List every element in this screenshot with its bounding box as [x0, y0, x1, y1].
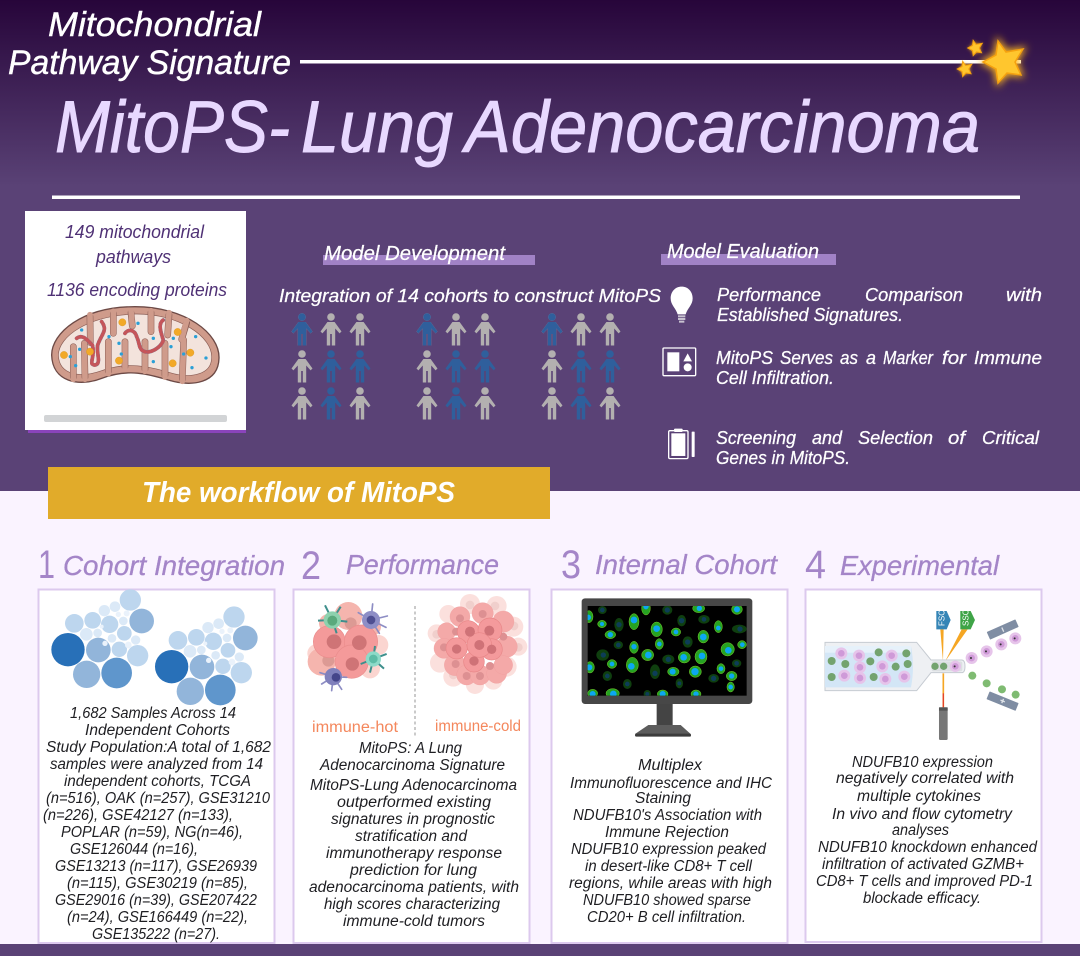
header background [0, 0, 1080, 491]
text: critical genes [716, 428, 1040, 468]
icon: light bulb [671, 287, 693, 323]
text: cohorts description: (n=226), GSE42127 (n=133), [43, 807, 233, 824]
heading: step 3: Internal Cohort [595, 549, 778, 580]
heading: step 4 [805, 543, 1000, 587]
icon: mitochondrion [52, 307, 219, 383]
text: signature description: prediction for lung [349, 862, 477, 879]
divider: dashed line [414, 606, 416, 736]
text: immunofluorescence description: NDUFB10 showed sparse [583, 892, 751, 909]
text: experimental description: In vivo and flow cytometry [832, 806, 1013, 823]
text: signature description: immune-cold tumors [343, 913, 485, 930]
text: experimental description: infiltration of activated GZMB+ [822, 856, 1024, 873]
text: experimental description: multiple cytokines [857, 788, 981, 805]
text: performance comparison: Established Signatures. [717, 305, 903, 325]
text: cohorts description: independent cohorts, TCGA [64, 773, 251, 790]
heading: step 4: Experimental [840, 550, 1000, 581]
text: immune marker: MitoPS [716, 348, 773, 368]
icon: flow cytometer: FSC [937, 610, 946, 626]
text: immune marker: Cell Infiltration. [716, 368, 834, 388]
text: cohorts description: Study Population:A total of 1,682 [46, 739, 271, 756]
subtitle [8, 6, 291, 82]
text: immunofluorescence description: Multiplex [638, 757, 703, 774]
heading: Model Evaluation: Model Evaluation [667, 241, 819, 263]
heading: step 2: 2 [301, 544, 321, 588]
text: critical genes: Genes in MitoPS. [716, 448, 850, 468]
heading: step 2: Performance [346, 549, 499, 580]
text: cohorts description: 1,682 Samples Across 14 [70, 705, 236, 722]
title: MitoPS- [55, 87, 290, 168]
text: immunofluorescence description: Staining [635, 790, 691, 807]
text: experimental description [816, 754, 1038, 907]
heading: step 2 [301, 544, 499, 588]
text: signature description: stratification and [355, 828, 468, 845]
panel: mitochondrial pathways: 149 mitochondrial [65, 222, 205, 242]
icon: panel shapes [663, 348, 696, 376]
text: critical genes: and [812, 428, 843, 448]
label: immune-hot: immune-hot [312, 719, 399, 736]
text: signature description: MitoPS-Lung Adenocarcinoma [310, 777, 517, 794]
text: immune marker: as [840, 348, 858, 368]
text: signature description: adenocarcinoma patients, with [309, 879, 519, 896]
text: experimental description: CD8+ T cells and improved PD-1 [816, 873, 1033, 890]
subtitle: Mitochondrial [48, 6, 263, 44]
subtitle: Pathway Signature [8, 44, 291, 82]
icon: people cohorts [292, 313, 620, 420]
text: cohorts description: GSE135222 (n=27). [92, 926, 220, 943]
text: immunofluorescence description: NDUFB10's Association with [573, 807, 762, 824]
text: signature description: immunotherapy response [326, 845, 502, 862]
label: immune-cold: immune-cold [435, 718, 521, 735]
text: cohorts description: GSE13213 (n=117), GSE26939 [55, 858, 257, 875]
text: critical genes: Screening [716, 428, 796, 448]
heading: step 4: 4 [805, 543, 826, 587]
text: integration: Integration of 14 cohorts to construct MitoPS [279, 286, 661, 306]
title [55, 87, 980, 168]
progress bar [44, 415, 227, 422]
panel: mitochondrial pathways: pathways [95, 247, 171, 267]
text: immune marker: a [866, 348, 876, 368]
panel: internal cohort [552, 590, 788, 943]
text: cohorts description: samples were analyzed from 14 [50, 756, 263, 773]
text: critical genes: of [948, 428, 967, 448]
heading: Model Development: Model Development [324, 243, 506, 265]
text: immunofluorescence description: Immunofluorescence and IHC [570, 775, 773, 792]
text: cohorts description: POPLAR (n=59), NG(n=46), [61, 824, 243, 841]
panel: cohort integration [38, 589, 274, 943]
icon: monitor with fluorescence image [582, 598, 752, 737]
text: cohorts description: (n=516), OAK (n=257), GSE31210 [46, 790, 270, 807]
text: immunofluorescence description: NDUFB10 expression peaked [571, 841, 767, 858]
text: immunofluorescence description: CD20+ B cell infiltration. [587, 909, 746, 926]
text: performance comparison: with [1006, 285, 1042, 305]
text: experimental description: negatively correlated with [836, 770, 1014, 787]
icon: flow cytometer [825, 609, 1021, 740]
workflow background [0, 491, 1080, 944]
icon: immune-cold tumor [428, 594, 527, 694]
text: experimental description: blockade efficacy. [863, 890, 981, 907]
panel: mitochondrial pathways [25, 211, 246, 433]
text: cohorts description: GSE126044 (n=16), [70, 841, 198, 858]
text: experimental description: NDUFB10 expression [852, 754, 993, 771]
text: critical genes: Selection [858, 428, 933, 448]
text: immune marker: Marker [883, 348, 934, 368]
text: signature description: MitoPS: A Lung [359, 740, 462, 757]
icon: immune-hot tumor [307, 602, 388, 691]
icon: flow cytometer: SSC [962, 609, 971, 626]
footer band [0, 944, 1080, 956]
banner: workflow: The workflow of MitoPS [142, 477, 456, 509]
text: cohorts description: Independent Cohorts [85, 722, 230, 739]
heading: step 1 [38, 543, 285, 587]
panel: experimental [806, 590, 1042, 942]
text: signature description: outperformed existing [337, 794, 491, 811]
text: signature description [309, 740, 519, 930]
text: performance comparison: Comparison [865, 285, 963, 305]
text: immune marker: Serves [780, 348, 833, 368]
text: performance comparison: Performance [717, 285, 821, 305]
text: immunofluorescence description: Immune Rejection [605, 824, 729, 841]
text: signature description: signatures in prognostic [331, 811, 495, 828]
text: immunofluorescence description: in desert-like CD8+ T cell [585, 858, 753, 875]
banner: workflow [48, 467, 550, 519]
panel: mitochondrial pathways: 1136 encoding proteins [47, 280, 227, 300]
heading: step 3: 3 [561, 543, 581, 587]
text: immunofluorescence description [569, 757, 773, 926]
text: immunofluorescence description: regions, while areas with high [569, 875, 772, 892]
text: immune marker: for [942, 348, 967, 368]
text: critical genes: Critical [982, 428, 1040, 448]
panel: performance [294, 590, 530, 943]
text: signature description: high scores characterizing [324, 896, 500, 913]
heading: step 3 [561, 543, 778, 587]
text: cohorts description [43, 705, 271, 943]
icon: clipboard [669, 429, 695, 459]
icon: stars [957, 40, 1023, 83]
text: cohorts description: (n=24), GSE166449 (n=22), [67, 909, 248, 926]
text: signature description: Adenocarcinoma Signature [319, 757, 505, 774]
text: immune marker [716, 348, 1042, 388]
heading: step 1: Cohort Integration [63, 550, 285, 581]
text: cohorts description: GSE29016 (n=39), GSE207422 [55, 892, 257, 909]
text: cohorts description: (n=115), GSE30219 (n=85), [67, 875, 248, 892]
text: immune marker: Immune [974, 348, 1042, 368]
title: Lung [301, 87, 453, 168]
title: Adenocarcinoma [461, 87, 980, 168]
text: performance comparison [717, 285, 1042, 325]
heading: step 1: 1 [38, 543, 55, 587]
text: experimental description: analyses [892, 822, 949, 839]
chart: bubble clusters [51, 589, 258, 705]
text: experimental description: NDUFB10 knockdown enhanced [818, 839, 1038, 856]
